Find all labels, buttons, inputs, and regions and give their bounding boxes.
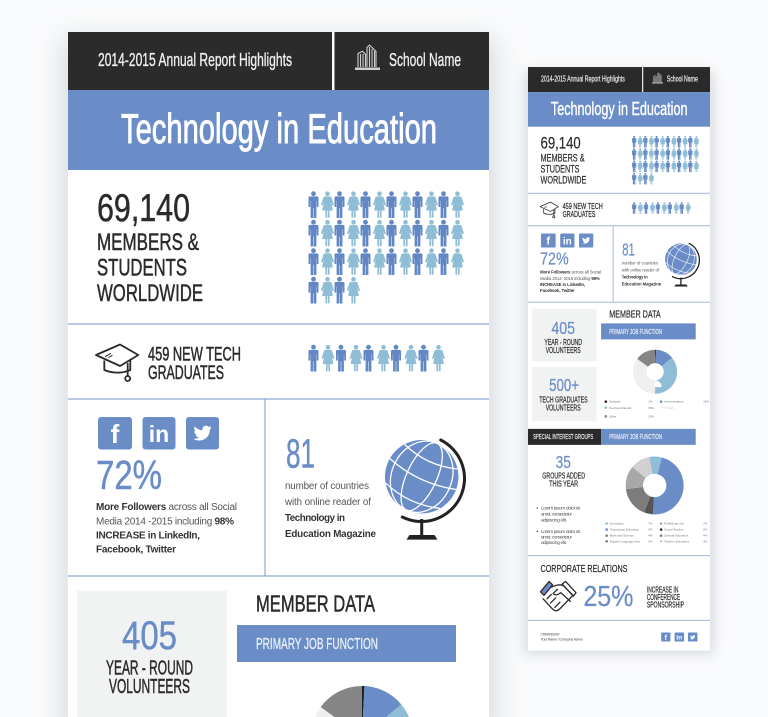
mini legend: primary job function: Administrators xyxy=(664,400,684,404)
stat: 72 percent followers: Facebook, Twitter xyxy=(96,544,176,556)
mini stat: 405 volunteers xyxy=(532,309,597,361)
stat: 72 percent followers: INCREASE in LinkedIn, xyxy=(96,530,200,542)
mini legend: primary job function xyxy=(605,400,709,418)
mini stat: graduates: GRADUATES xyxy=(563,210,596,219)
mini legend: interest groups: 5% xyxy=(648,528,653,532)
mini donut chart: primary job function xyxy=(640,356,670,387)
mini stat: 500+ volunteers: 500+ xyxy=(549,375,579,395)
mini legend: primary job function: 14% xyxy=(703,400,709,404)
mini heading: member data: MEMBER DATA xyxy=(609,310,661,321)
mini legend: interest groups xyxy=(605,522,708,543)
mini icon: globe xyxy=(660,238,702,286)
icon: graduation cap xyxy=(96,344,138,381)
stat: volunteers xyxy=(77,591,227,717)
mini pictogram: members xyxy=(632,136,699,184)
mini bullet list: amet, consectetur xyxy=(541,534,572,540)
stat: members and students: MEMBERS & xyxy=(97,229,199,256)
stat: 81 countries xyxy=(284,430,377,540)
mini section header: special interest groups: SPECIAL INTEREST GROUPS xyxy=(533,434,594,441)
mini text: sponsorship: INCREASE IN xyxy=(647,585,679,594)
header bar: School Name xyxy=(389,49,461,70)
mini icons: social media: f xyxy=(546,236,550,248)
mini heading bar: primary job function xyxy=(601,323,696,339)
mini text: sponsorship xyxy=(647,585,684,609)
mini stat: 405 volunteers: VOLUNTEERS xyxy=(546,345,581,355)
mini stat: 72 percent: Facebook, Twitter xyxy=(540,288,575,293)
mini stat: 405 volunteers: 405 xyxy=(551,318,575,338)
title banner xyxy=(68,90,489,170)
mini legend: interest groups: 4% xyxy=(648,539,653,543)
stat: volunteers: VOLUNTEERS xyxy=(109,676,190,698)
heading bar: primary job function xyxy=(237,625,456,662)
mini legend: interest groups: Technology Education xyxy=(610,528,640,532)
mini footer credit xyxy=(541,632,583,641)
mini donut chart: interest groups xyxy=(631,462,678,509)
mini legend: interest groups: 7% xyxy=(703,522,708,526)
mini legend: interest groups: 3% xyxy=(703,539,708,543)
mini stat: 72 percent: Media 2014 -2015 including 98% xyxy=(540,276,600,281)
header bar: 2014-2015 Annual Report Highlights xyxy=(98,49,292,70)
mini stat: groups added: 35 xyxy=(556,452,571,472)
mini header bar: 2014-2015 Annual Report Highlights xyxy=(541,75,625,84)
mini legend: interest groups: Innovation xyxy=(610,522,624,526)
donut chart: primary job function xyxy=(326,702,398,717)
stat: members and students: WORLDWIDE xyxy=(97,280,203,307)
panel: small full report preview xyxy=(524,67,714,655)
mini icons: social media: in xyxy=(563,236,572,247)
mini footer social icons: f xyxy=(665,633,668,642)
mini stat: 72 percent: INCREASE in LinkedIn, xyxy=(540,282,585,287)
stat: 72 percent followers xyxy=(96,452,237,556)
pictogram: graduates xyxy=(308,345,445,372)
mini stat: 81 countries: Education Magazine xyxy=(622,281,662,286)
mini stat: groups added xyxy=(542,452,585,489)
mini bullet list xyxy=(537,505,580,546)
mini icon: handshake xyxy=(541,581,576,611)
pictogram: members xyxy=(308,191,464,304)
mini stat: 72 percent xyxy=(540,249,601,293)
mini stat: 81 countries: with online reader of xyxy=(622,268,660,273)
mini stat: 72 percent: More Followers across all Social xyxy=(540,270,601,275)
mini stat: groups added: GROUPS ADDED xyxy=(542,471,585,481)
mini legend: primary job function: IT Staff xyxy=(664,406,674,410)
mini legend: primary job function: 15% xyxy=(648,414,655,418)
icons: social media: f xyxy=(111,419,120,449)
mini text: sponsorship: CONFERENCE xyxy=(647,593,680,602)
mini bullet list: Lorem ipsum dolor sit xyxy=(541,505,580,511)
mini section header: special interest groups xyxy=(528,429,696,445)
icons: social media xyxy=(98,417,219,450)
mini legend: primary job function: Other xyxy=(609,414,616,418)
mini heading: corporate relations: CORPORATE RELATIONS xyxy=(541,564,628,575)
mini legend: primary job function: Teachers/Faculty xyxy=(609,406,632,410)
mini heading bar: primary job function: PRIMARY JOB FUNCTION xyxy=(609,329,662,336)
mini legend: interest groups: Special Education xyxy=(664,534,689,538)
icons: social media: in xyxy=(149,421,169,447)
mini stat: 81 countries xyxy=(622,239,662,286)
stat: members and students: STUDENTS xyxy=(97,254,187,282)
mini stat: 500+ volunteers: VOLUNTEERS xyxy=(546,402,581,412)
mini legend: primary job function: 36% xyxy=(648,406,655,410)
mini legend: interest groups: Math and Science xyxy=(610,534,634,538)
stat: volunteers: 405 xyxy=(122,614,177,658)
mini stat: 81 countries: Technology in xyxy=(622,274,648,279)
icon: globe xyxy=(385,438,466,540)
mini legend: interest groups: Publishing Use xyxy=(664,522,685,526)
mini legend: interest groups: English Language Arts xyxy=(610,539,640,543)
mini legend: interest groups: 4% xyxy=(648,534,653,538)
mini stat: 25 percent: 25% xyxy=(583,581,633,613)
mini stat: members: STUDENTS xyxy=(541,163,579,175)
mini bullet list: amet, consectetur xyxy=(541,511,572,517)
mini stat: 500+ volunteers: TECH GRADUATES xyxy=(539,394,588,404)
mini icon: graduation cap xyxy=(540,202,558,218)
panel: large report preview xyxy=(62,32,495,717)
mini section header: special interest groups: PRIMARY JOB FUNCTION xyxy=(609,434,662,441)
stat: 81 countries: Education Magazine xyxy=(285,529,377,540)
mini footer social icons xyxy=(661,632,697,642)
mini bullet list: adipiscing elit. xyxy=(541,540,567,546)
mini legend: interest groups: 5% xyxy=(703,528,708,532)
stat: 72 percent followers: 72% xyxy=(96,452,162,498)
mini stat: members: 69,140 xyxy=(541,134,581,153)
stat: new tech graduates: GRADUATES xyxy=(148,363,224,384)
stat: 72 percent followers: Media 2014 -2015 including 98% xyxy=(96,516,234,528)
mini legend: interest groups: Social Studies xyxy=(664,528,684,532)
mini footer credit: CREATED BY xyxy=(541,632,560,637)
mini pictogram: graduates xyxy=(632,202,691,214)
mini footer credit: Your Name / Company Name xyxy=(541,636,583,641)
stat: new tech graduates xyxy=(148,346,240,380)
title banner: Technology in Education xyxy=(121,105,437,152)
mini bullet list: Lorem ipsum dolor sit xyxy=(541,529,580,535)
stat: 81 countries: Technology in xyxy=(285,513,345,524)
mini stat: graduates: 459 NEW TECH xyxy=(563,202,603,211)
mini header bar xyxy=(528,67,710,92)
mini legend: primary job function: Students xyxy=(609,400,621,404)
mini stat: 500+ volunteers xyxy=(532,367,597,421)
stat: members and students xyxy=(97,187,203,307)
mini stat: 72 percent: 72% xyxy=(540,249,569,269)
stat: 72 percent followers: More Followers across all Social xyxy=(96,502,237,513)
stat: new tech graduates: 459 NEW TECH xyxy=(148,344,241,366)
mini icons: social media xyxy=(541,233,593,248)
mini text: sponsorship: SPONSORSHIP xyxy=(647,600,684,609)
mini stat: members: MEMBERS & xyxy=(541,152,585,164)
mini legend: interest groups: 4% xyxy=(703,534,708,538)
mini stat: 81 countries: number of countries xyxy=(622,261,658,266)
mini stat: 405 volunteers: YEAR - ROUND xyxy=(544,337,582,347)
heading: member data: MEMBER DATA xyxy=(256,590,375,616)
mini legend: primary job function: 1% xyxy=(648,400,653,404)
mini bullet list: adipiscing elit. xyxy=(541,517,567,523)
stat: 81 countries: with online reader of xyxy=(284,497,371,508)
mini stat: graduates xyxy=(563,202,603,219)
mini legend: interest groups: 7% xyxy=(648,522,653,526)
mini stat: members: WORLDWIDE xyxy=(541,174,586,186)
mini stat: members xyxy=(541,134,586,186)
stat: members and students: 69,140 xyxy=(97,187,190,230)
mini header bar: School Name xyxy=(667,75,698,84)
mini footer social icons: in xyxy=(676,634,682,641)
mini legend: interest groups: Teacher Educators xyxy=(664,539,690,543)
heading bar: primary job function: PRIMARY JOB FUNCTION xyxy=(256,636,378,653)
mini title banner: Technology in Education xyxy=(551,99,688,119)
mini title banner xyxy=(528,92,710,127)
stat: 81 countries: 81 xyxy=(286,430,315,476)
stat: 81 countries: number of countries xyxy=(285,481,369,492)
mini stat: groups added: THIS YEAR xyxy=(549,479,578,489)
mini stat: 81 countries: 81 xyxy=(622,239,635,259)
header bar xyxy=(68,32,489,90)
stat: volunteers: YEAR - ROUND xyxy=(106,658,193,680)
